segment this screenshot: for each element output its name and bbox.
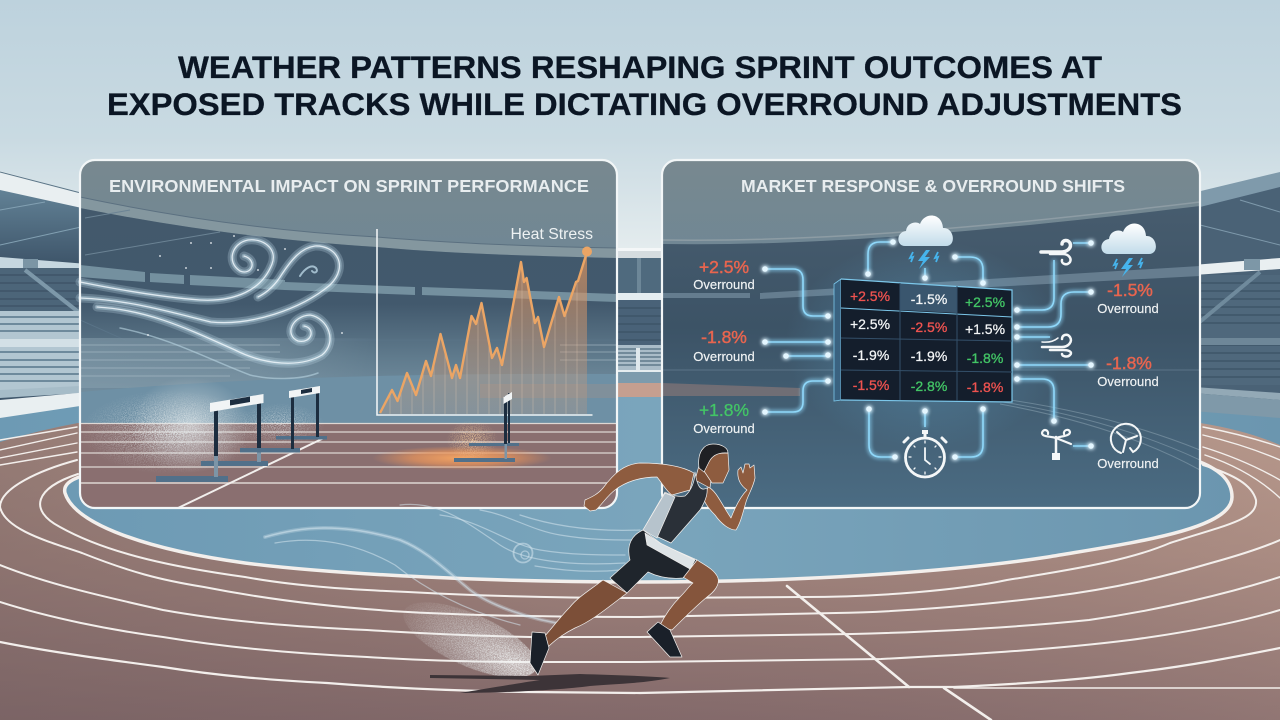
label: right overround -1.5 [1097,280,1159,316]
dust particles [147,235,343,336]
dust cloud: left hurdles [80,377,325,474]
stadium: right stand [1180,172,1280,418]
connectors [765,242,1091,457]
chart label: Heat Stress [510,226,593,243]
front arm [704,464,755,530]
title: WEATHER PATTERNS RESHAPING SPRINT OUTCOMES AT [178,49,1102,85]
front shoe [647,622,682,657]
odds table: -1.5% [911,291,947,307]
odds table [834,279,1012,402]
panel: environmental impact [80,160,617,508]
hair [699,444,728,472]
odds table: -1.8% [967,379,1003,395]
odds table: -1.5% [853,377,889,393]
tank top [643,472,707,543]
label: left overround +2.5: +2.5% [699,257,749,277]
label: right overround -1.5: Overround [1097,301,1159,316]
heat glow on track [372,420,552,470]
chart: heat stress line [377,226,593,415]
icon: stopwatch [904,430,946,477]
icon: wind middle [1042,335,1071,357]
odds table: -1.8% [967,350,1003,366]
rear leg [544,580,627,647]
odds table: +1.5% [965,321,1005,337]
icon: wind swirls [80,240,339,379]
label: right overround -1.5: -1.5% [1107,280,1153,300]
stadium: far side between panels [617,248,662,397]
label: right overround gauge: Overround [1097,456,1159,471]
shorts [610,530,697,593]
neck [695,462,712,488]
running track surface [0,423,1280,720]
track lane lines [0,427,1280,720]
panel: market response [662,160,1200,508]
label: left overround -1.8 [693,327,755,364]
sky background [0,0,1280,250]
panel border right [662,160,1200,508]
icon: wind top [1041,240,1071,264]
connector nodes [762,239,1094,460]
icon: hurdle front [156,394,268,482]
label: left overround -1.8: Overround [693,349,755,364]
title: EXPOSED TRACKS WHILE DICTATING OVERROUND ADJUSTMENTS [107,86,1182,122]
label: right overround -1.8 [1097,353,1159,389]
shorts stripe [645,533,695,569]
heading: panel left: ENVIRONMENTAL IMPACT ON SPRINT PERFORMANCE [109,176,589,196]
odds table: -2.8% [911,378,947,394]
odds table: +2.5% [850,316,890,332]
panel border left [80,160,617,508]
glow behind grid [785,240,1065,450]
dust spray at foot [394,587,546,693]
title [107,49,1182,122]
icon: hurdle rear [240,386,327,452]
icon: hurdle at heat zone [454,392,519,462]
label: left overround +1.8: +1.8% [699,400,749,420]
odds table: -2.5% [911,319,947,335]
stadium: left stand [0,171,100,418]
wind streaks near runner [265,504,640,625]
label: left overround +1.8 [693,400,755,436]
odds table: +2.5% [965,294,1005,310]
label: right overround -1.8: -1.8% [1106,353,1152,373]
label: left overround -1.8: -1.8% [701,327,747,347]
odds table: -1.9% [853,347,889,363]
front leg [659,560,718,630]
odds table: +2.5% [850,288,890,304]
label: left overround +2.5 [693,257,755,292]
icon: storm cloud top [898,215,953,269]
rear arm [584,463,694,511]
label: right overround -1.8: Overround [1097,374,1159,389]
icon: anemometer [1042,430,1071,460]
runner [530,444,755,675]
label: left overround +1.8: Overround [693,421,755,436]
icon: wind gauge [1111,424,1141,453]
tank side stripe [643,493,675,538]
odds table: -1.9% [911,348,947,364]
infield [65,397,1232,582]
runner shadow [430,674,670,693]
heading: panel right: MARKET RESPONSE & OVERROUND SHIFTS [741,176,1125,196]
label: left overround +2.5: Overround [693,277,755,292]
icon: storm cloud right [1101,223,1156,277]
blue band behind track [0,397,1280,457]
head [701,453,729,483]
rear shoe [530,632,549,675]
